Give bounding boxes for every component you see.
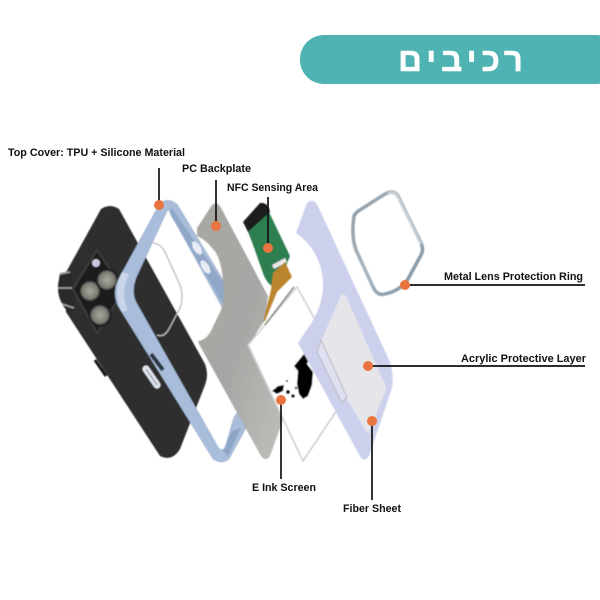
callout: e ink screen xyxy=(252,395,316,494)
callout: metal lens protection ring xyxy=(400,271,585,290)
metal lens ring xyxy=(353,192,422,294)
callout: nfc sensing area xyxy=(227,182,319,253)
metal corner xyxy=(58,271,75,312)
e ink screen xyxy=(248,287,340,461)
exploded phone case diagram xyxy=(58,192,423,462)
camera island xyxy=(73,250,124,333)
title banner xyxy=(300,35,600,84)
callout: pc backplate xyxy=(182,163,251,231)
callout: metal lens protection ring: Metal Lens Protection Ring xyxy=(444,271,583,283)
blue frame xyxy=(115,200,290,462)
callout: top cover: Top Cover: TPU + Silicone Material xyxy=(8,147,185,159)
PCB xyxy=(243,203,292,322)
e ink image xyxy=(272,354,313,399)
lilac fiber sheet xyxy=(296,201,393,460)
callout: fiber sheet xyxy=(343,416,401,515)
callout: top cover xyxy=(8,147,185,210)
callout: pc backplate: PC Backplate xyxy=(182,163,251,175)
callout: fiber sheet: Fiber Sheet xyxy=(343,503,401,515)
charging port xyxy=(223,428,241,456)
callout: e ink screen: E Ink Screen xyxy=(252,482,316,494)
black phone xyxy=(58,206,207,458)
callout: acrylic protective layer: Acrylic Protective Layer xyxy=(461,353,587,365)
callout: nfc sensing area: NFC Sensing Area xyxy=(227,182,319,194)
inner wall xyxy=(170,207,224,306)
acrylic layer xyxy=(318,293,386,434)
slot xyxy=(317,340,347,403)
lenses xyxy=(78,280,102,302)
callout: acrylic protective layer xyxy=(363,353,587,371)
buttons xyxy=(151,354,163,370)
lens ring outline xyxy=(152,243,182,336)
title text: רכיבים xyxy=(398,41,528,78)
grey backplate xyxy=(197,203,283,459)
